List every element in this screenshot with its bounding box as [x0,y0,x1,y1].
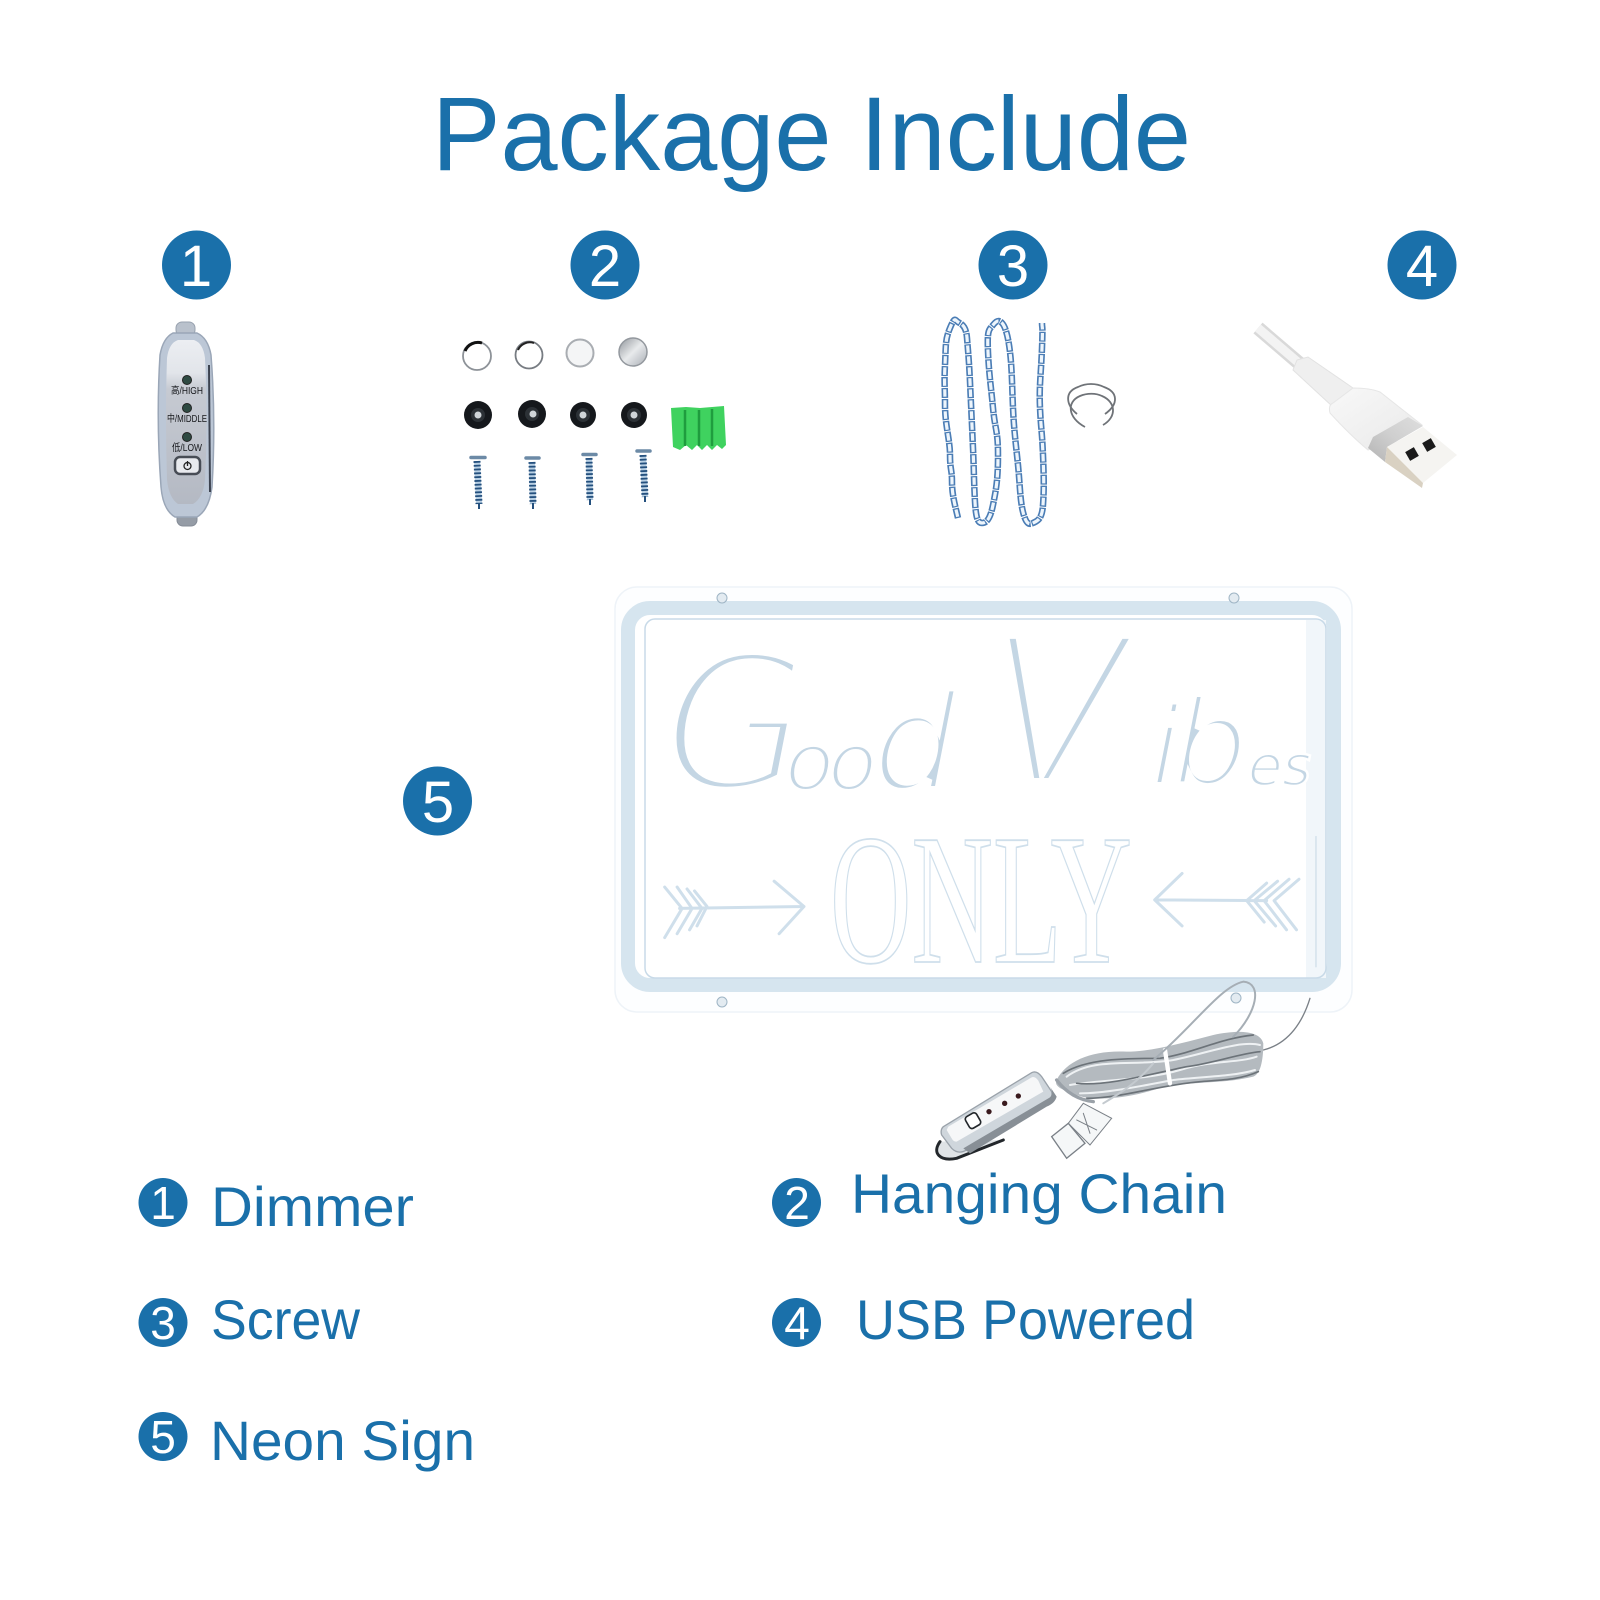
screws [471,451,650,509]
neon lettering: Good Vibes: e [1248,734,1282,799]
icon: dimmer: 高/HIGH [171,384,203,397]
neon arrow right [665,881,804,938]
badge 4 [1388,230,1456,300]
mounting holes [717,593,1241,1007]
neon lettering: Good Vibes: G [662,614,809,835]
icon: screw caps and screws [463,338,726,509]
title: Package Include [432,76,1191,193]
neon lettering: Good Vibes: b [1172,675,1248,814]
legend item 1: Dimmer [211,1175,414,1238]
badge 5 [403,766,472,836]
neon lettering: ONLY: ONLY [830,797,1132,1003]
legend item 3: Screw [211,1288,361,1351]
badge 2: 2 [589,234,621,299]
green wall anchors [671,406,726,450]
icon: dimmer: 中/MIDDLE [167,412,207,425]
rubber washers [464,400,647,429]
icon: usb plug [1258,328,1457,488]
badge 5: 5 [422,770,454,835]
badge 3: 3 [997,234,1029,299]
legend item 2: 2 [784,1177,810,1229]
inline dimmer body [937,1072,1057,1159]
neon border tube [628,608,1334,985]
neon sign panel [615,587,1352,1012]
neon lettering: Good Vibes: o [785,716,834,809]
neon lettering: Good Vibes: o [828,716,877,809]
power cord and inline dimmer [937,837,1316,1159]
badge 1 [162,230,231,300]
usb plug on cord [1052,1103,1112,1158]
legend item 5: Neon Sign [210,1409,475,1472]
wires [1056,837,1316,1103]
legend item 2: Hanging Chain [851,1162,1227,1225]
legend item 3: 3 [150,1297,176,1349]
screw caps [463,338,647,370]
badge 2 [570,230,640,300]
legend item 5: 5 [150,1411,176,1463]
icon: dimmer: 低/LOW [172,441,202,454]
legend item 1: 1 [150,1177,176,1229]
badge 4: 4 [1406,234,1438,299]
badge 3 [978,230,1048,300]
badge 1: 1 [180,234,212,299]
icon: dimmer [158,322,214,526]
neon arrow left [1155,873,1299,930]
icon: hanging chain [945,320,1115,524]
legend item 4: 4 [784,1297,810,1349]
legend item 3 [138,1288,361,1351]
split rings [1068,384,1115,427]
neon lettering: Good Vibes: V [985,590,1141,835]
neon lettering: Good Vibes: i [1150,683,1181,811]
neon lettering: Good Vibes: d [872,665,959,822]
legend item 4: USB Powered [856,1288,1195,1351]
neon lettering: Good Vibes: s [1282,734,1311,799]
